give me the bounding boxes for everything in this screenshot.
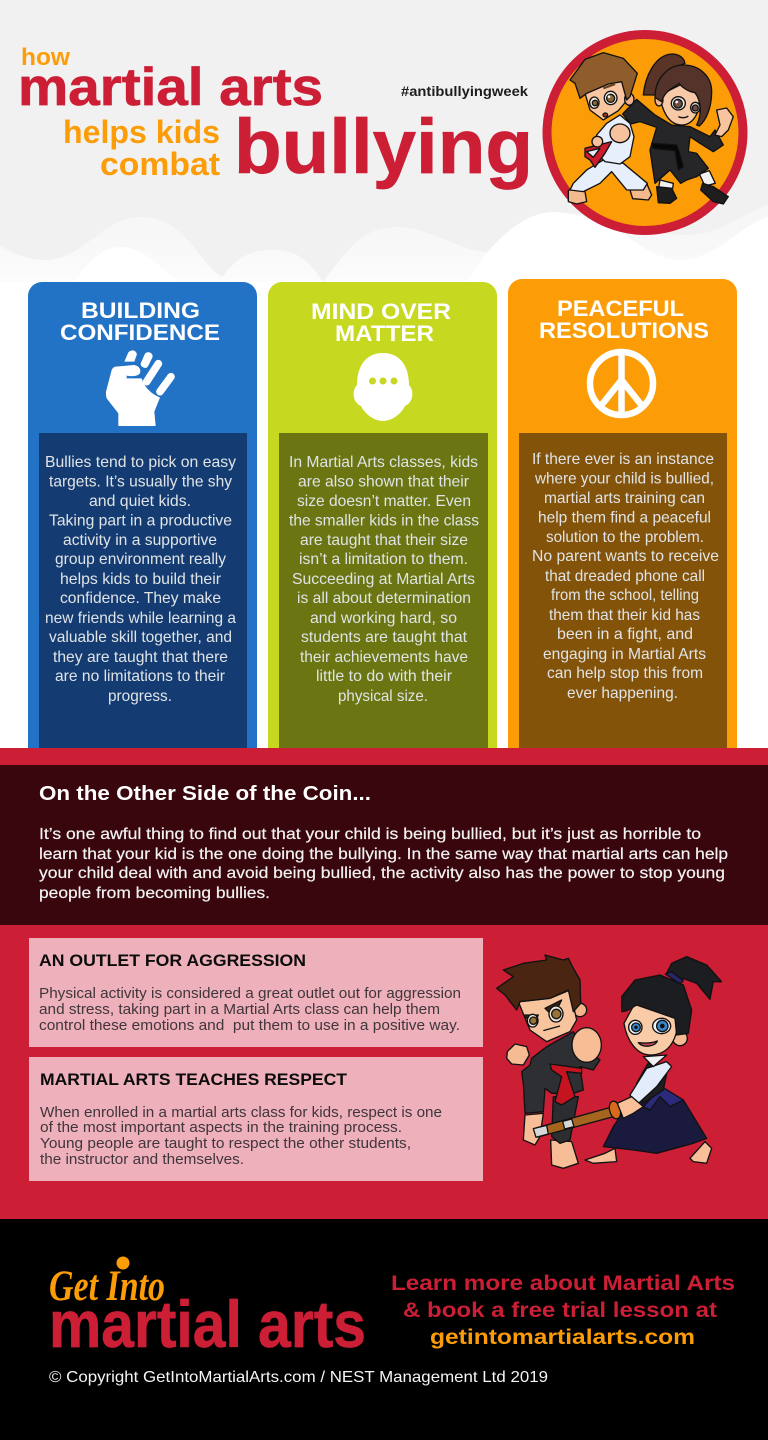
panel: other side of the coin <box>0 765 768 925</box>
body text: their achievements have <box>300 649 468 666</box>
body text: been in a fight, and <box>557 626 693 643</box>
body text: can help stop this from <box>547 665 703 682</box>
body text: progress. <box>108 688 172 705</box>
copyright: © Copyright GetIntoMartialArts.com / NEST Management Ltd 2019 <box>49 1369 548 1386</box>
staff <box>533 1100 622 1137</box>
paragraph: people from becoming bullies. <box>39 885 270 902</box>
body text: confidence. They make <box>60 590 221 607</box>
body text: valuable skill together, and <box>49 629 232 646</box>
icon: head with thought dots <box>354 353 412 421</box>
heading <box>60 298 220 345</box>
panel: mind over matter <box>268 282 497 762</box>
girl with hakama <box>585 957 722 1163</box>
boy in black gi <box>497 955 601 1168</box>
footer background <box>0 1219 768 1440</box>
heading: MIND OVER <box>311 299 451 324</box>
body text: that dreaded phone call <box>545 568 705 585</box>
body text: helps kids to build their <box>60 571 222 588</box>
body text: of the most important aspects in the training process. <box>40 1119 402 1136</box>
body text: isn’t a limitation to them. <box>299 551 468 568</box>
body text: Taking part in a productive <box>49 512 232 530</box>
panel: building confidence <box>28 282 257 762</box>
badge: two martial arts kids in orange circle <box>547 34 743 230</box>
body text: group environment really <box>55 551 226 568</box>
title: how <box>21 44 70 71</box>
boy in white gi <box>568 53 652 204</box>
body text: If there ever is an instance <box>532 451 714 468</box>
body text: solution to the problem. <box>546 529 704 546</box>
heading: AN OUTLET FOR AGGRESSION <box>39 951 306 970</box>
body text <box>40 1104 442 1168</box>
body text: them that their kid has <box>549 607 700 624</box>
call to action: getintomartialarts.com <box>430 1326 695 1349</box>
title: combat <box>100 146 220 182</box>
body text: Physical activity is considered a great outlet out for aggression <box>39 985 461 1002</box>
paragraph: your child deal with and avoid being bullied, the activity also has the power to stop young <box>39 865 725 882</box>
paragraph <box>39 826 728 902</box>
call to action: Learn more about Martial Arts <box>391 1272 735 1295</box>
body text: they are taught that there <box>53 649 228 666</box>
body text: When enrolled in a martial arts class for kids, respect is one <box>40 1104 442 1121</box>
body text: and quiet kids. <box>89 493 191 510</box>
body text: Bullies tend to pick on easy <box>45 454 236 471</box>
body text: where your child is bullied, <box>534 470 714 488</box>
body text: help them find a peaceful <box>538 510 711 526</box>
heading <box>311 299 451 346</box>
title: helps kids <box>63 114 220 150</box>
body text: Young people are taught to respect the other students, <box>40 1135 411 1152</box>
body text: is all about determination <box>297 590 471 607</box>
body text: size doesn’t matter. Even <box>297 493 471 510</box>
heading: MATTER <box>335 321 434 346</box>
body text: new friends while learning a <box>45 610 236 627</box>
heading: RESOLUTIONS <box>539 318 709 343</box>
paragraph: It’s one awful thing to find out that your child is being bullied, but it’s just as horrible to <box>39 826 701 843</box>
body text: are no limitations to their <box>55 668 226 685</box>
red section background <box>0 748 768 1219</box>
paragraph: learn that your kid is the one doing the bullying. In the same way that martial arts can help <box>39 846 728 863</box>
body text: targets. It’s usually the shy <box>49 474 232 490</box>
text panel <box>519 433 727 748</box>
heading: PEACEFUL <box>557 296 684 321</box>
title: bullying <box>234 104 533 190</box>
heading: MARTIAL ARTS TEACHES RESPECT <box>40 1070 348 1089</box>
body text <box>532 451 719 702</box>
body text: are taught that their size <box>300 532 468 549</box>
logo: get into martial arts: Get Into <box>49 1263 165 1310</box>
logo: get into martial arts: martial arts <box>49 1287 366 1361</box>
call to action <box>391 1272 735 1349</box>
title: martial arts <box>18 58 323 117</box>
body text: physical size. <box>338 688 428 705</box>
heading: On the Other Side of the Coin... <box>39 783 371 805</box>
panel: an outlet for aggression <box>29 938 483 1047</box>
body text <box>289 454 479 705</box>
text panel <box>39 433 247 748</box>
body text <box>39 985 461 1034</box>
heading: CONFIDENCE <box>60 320 220 345</box>
body text: control these emotions and put them to use in a positive way. <box>39 1017 460 1034</box>
icon: peace sign <box>590 352 653 415</box>
text panel <box>279 433 488 748</box>
body text: the instructor and themselves. <box>40 1151 244 1168</box>
body text: from the school, telling <box>551 587 699 604</box>
body text: the smaller kids in the class <box>289 512 479 530</box>
body text: and stress, taking part in a Martial Arts class can help them <box>39 1001 440 1018</box>
heading <box>539 296 709 343</box>
illustration: boy and girl with staff <box>497 955 722 1168</box>
icon: raised fist <box>106 350 171 426</box>
panel: peaceful resolutions <box>508 279 737 762</box>
body text: No parent wants to receive <box>532 548 719 565</box>
hashtag: #antibullyingweek <box>401 83 528 99</box>
body text: Succeeding at Martial Arts <box>292 571 475 588</box>
header background with waves <box>0 0 768 752</box>
panel: martial arts teaches respect <box>29 1057 483 1181</box>
body text: activity in a supportive <box>63 532 217 549</box>
call to action: & book a free trial lesson at <box>403 1299 717 1322</box>
body text: and working hard, so <box>310 610 457 627</box>
body text <box>45 454 236 705</box>
title <box>18 44 533 190</box>
body text: little to do with their <box>316 668 453 685</box>
body text: martial arts training can <box>544 490 705 507</box>
heading: BUILDING <box>81 298 200 323</box>
body text: engaging in Martial Arts <box>543 646 706 663</box>
body text: students are taught that <box>301 629 468 646</box>
girl in black uniform <box>623 54 733 204</box>
logo: get into martial arts <box>49 1256 366 1361</box>
body text: ever happening. <box>567 685 678 702</box>
body text: In Martial Arts classes, kids <box>289 454 478 471</box>
body text: are also shown that their <box>298 474 470 490</box>
